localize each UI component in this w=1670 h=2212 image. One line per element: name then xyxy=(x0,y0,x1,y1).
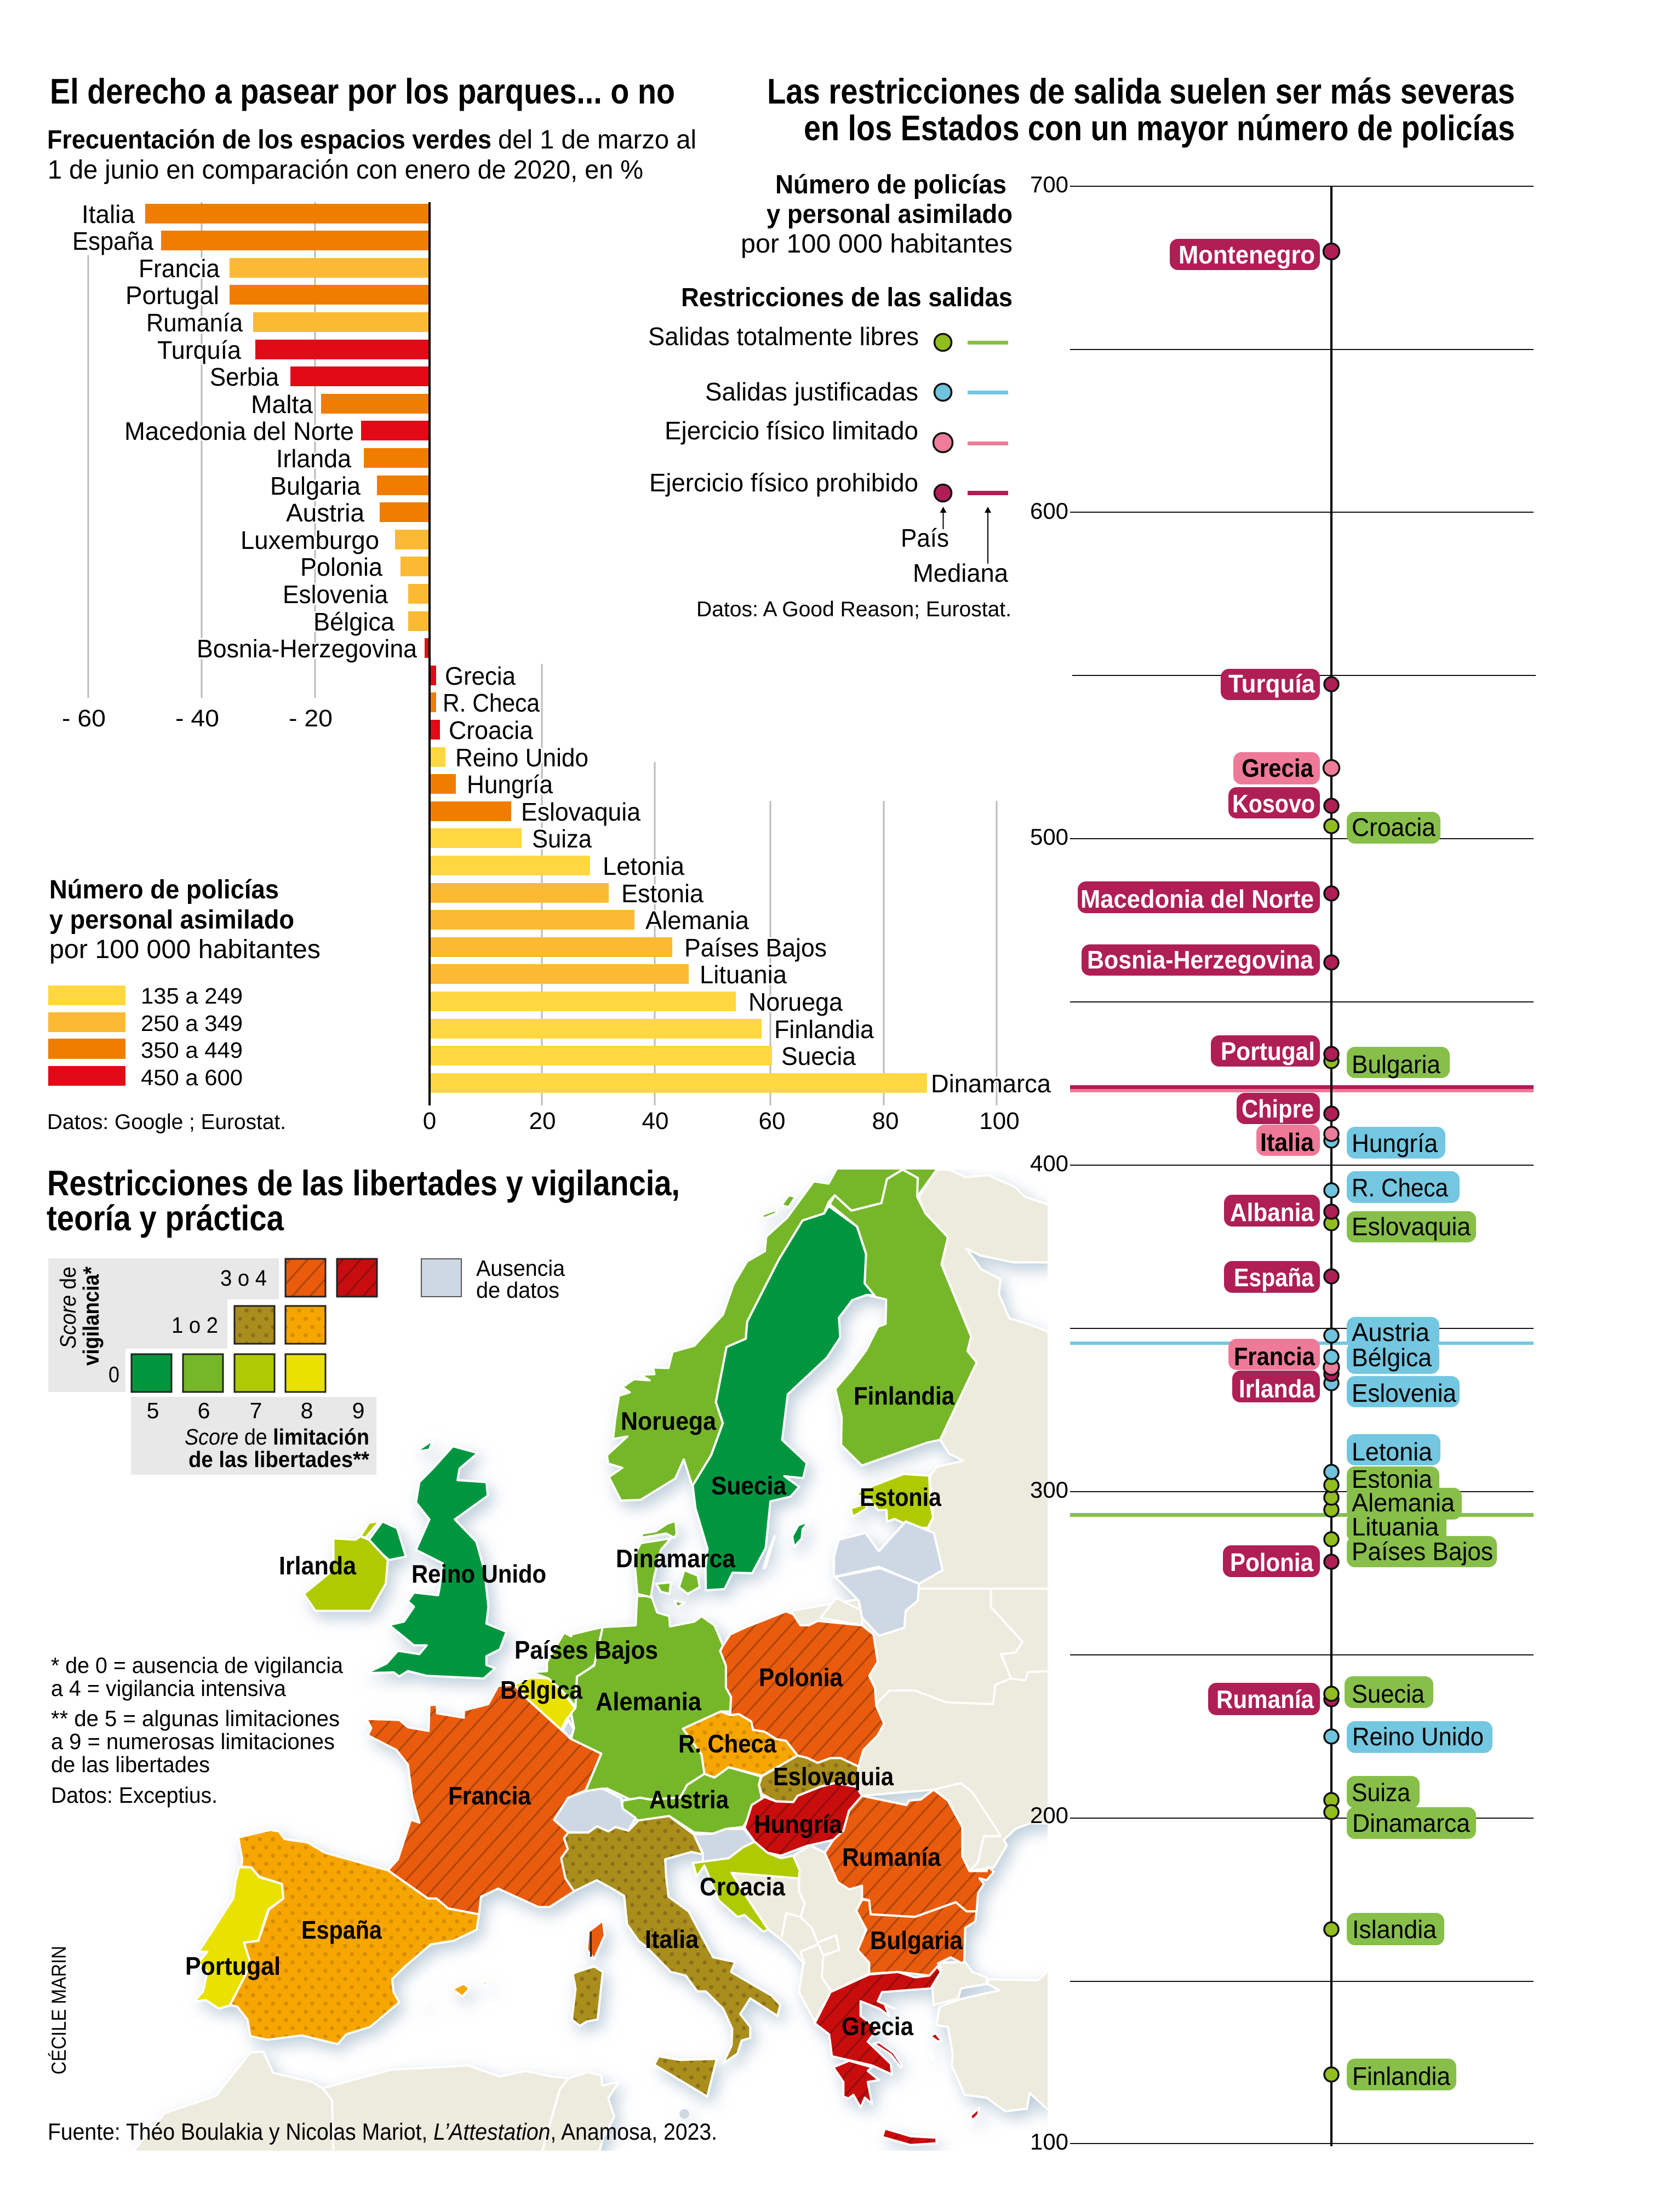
heading: map: Restricciones de las libertades y vigilancia, xyxy=(47,1163,680,1203)
country labels right: Lituania xyxy=(1352,1512,1439,1541)
bar labels: Portugal xyxy=(125,281,219,310)
country labels right: Bulgaria xyxy=(1352,1050,1440,1079)
legend: police per 100 000 (bars) xyxy=(48,875,321,1090)
bar labels: R. Checa xyxy=(443,689,540,717)
land: eastern Europe xyxy=(786,1589,1050,1871)
map country labels: Alemania xyxy=(596,1687,701,1716)
map country labels: España xyxy=(301,1916,382,1944)
axis values: 200 xyxy=(1030,1802,1068,1828)
arrow: country xyxy=(940,507,947,529)
legend: police per 100 000 (bars): y personal asimilado xyxy=(49,906,294,935)
credit: author: CÉCILE MARIN xyxy=(48,1946,70,2075)
map country labels xyxy=(185,1382,963,2041)
map country labels: Austria xyxy=(649,1785,729,1814)
land: Kaliningrad xyxy=(820,1598,862,1625)
positive bars xyxy=(430,666,927,1093)
country: Spain xyxy=(230,1830,479,2044)
map country labels: Estonia xyxy=(860,1483,941,1511)
axis tick labels: 80 xyxy=(872,1108,899,1134)
subtitle: parks: 1 de junio en comparación con enero de 2020, en % xyxy=(48,156,643,185)
map country labels: Finlandia xyxy=(854,1382,954,1410)
bar labels: Suiza xyxy=(532,824,592,853)
subtitle: parks: del 1 de marzo al xyxy=(498,125,696,154)
map country labels: Italia xyxy=(645,1925,699,1953)
country: United Kingdom xyxy=(365,1440,506,1678)
country labels left: España xyxy=(1234,1263,1314,1292)
country: Italy xyxy=(561,1816,780,2064)
subtitle: parks: Frecuentación de los espacios verdes xyxy=(47,125,491,154)
country: Slovenia xyxy=(694,1829,754,1862)
axis values: 100 xyxy=(1030,2129,1068,2154)
country labels right: Estonia xyxy=(1352,1465,1432,1493)
country: Germany xyxy=(571,1596,731,1801)
map country labels: Suecia xyxy=(711,1471,786,1500)
country: Romania xyxy=(825,1790,994,1917)
legend: no data: Ausencia xyxy=(476,1256,565,1281)
vertical axis xyxy=(1330,186,1332,2146)
Norwegian islands xyxy=(762,1195,796,1218)
country: Norway xyxy=(607,1167,938,1500)
bar labels: Francia xyxy=(139,254,220,283)
country: Bulgaria xyxy=(856,1900,977,1975)
bar labels: España xyxy=(72,227,153,255)
legend: bivariate matrix: Score de limitación xyxy=(185,1424,369,1449)
map country labels: Dinamarca xyxy=(616,1544,735,1573)
country: Greece xyxy=(815,1967,980,2145)
strip chart: police numbers by country xyxy=(1030,171,1536,2154)
legend: exit restrictions: Número de policías xyxy=(775,170,1006,199)
map country labels: Irlanda xyxy=(279,1551,356,1580)
legend: bivariate matrix xyxy=(48,1258,377,1475)
country: Poland xyxy=(720,1612,884,1767)
legend: exit restrictions: Salidas justificadas xyxy=(705,377,918,406)
zero axis xyxy=(428,202,431,1105)
legend: bivariate matrix: de las libertades** xyxy=(188,1447,369,1472)
notes: Datos: Exceptius. xyxy=(51,1783,218,1808)
axis tick labels: - 40 xyxy=(175,705,219,732)
map country labels: Países Bajos xyxy=(514,1636,658,1664)
legend: exit restrictions: Salidas totalmente libres xyxy=(648,322,919,351)
bar labels: Grecia xyxy=(445,662,516,690)
legend: bivariate matrix: vigilancia* xyxy=(78,1267,104,1366)
median lines xyxy=(1070,1085,1534,1517)
country: Croatia xyxy=(693,1842,799,1932)
country labels right: Finlandia xyxy=(1352,2062,1450,2090)
legend: bivariate matrix: Score de xyxy=(55,1267,81,1349)
map country labels: Francia xyxy=(448,1781,531,1810)
Malta xyxy=(679,2109,689,2119)
country labels left: Albania xyxy=(1230,1198,1314,1227)
legend: exit restrictions: Restricciones de las salidas xyxy=(681,283,1013,312)
axis values: 400 xyxy=(1030,1150,1068,1176)
legend: police per 100 000 (bars): Número de policías xyxy=(49,875,279,904)
Balearic islands xyxy=(423,1981,488,2005)
land: Thrace xyxy=(932,1962,987,2005)
map country labels: Reino Unido xyxy=(411,1560,546,1588)
axis tick labels: 0 xyxy=(423,1108,436,1134)
country labels right: Croacia xyxy=(1352,813,1435,841)
bar labels: Letonia xyxy=(603,852,684,880)
country labels left: Francia xyxy=(1234,1342,1315,1371)
bar labels: Noruega xyxy=(748,988,843,1016)
bar labels: Bélgica xyxy=(313,608,394,636)
country: Denmark xyxy=(634,1538,700,1607)
country labels left: Rumanía xyxy=(1216,1685,1314,1714)
heading: map xyxy=(47,1163,680,1238)
map country labels: Bélgica xyxy=(500,1676,582,1704)
legend: exit restrictions: Ejercicio físico limitado xyxy=(665,416,918,445)
bar labels: Eslovaquia xyxy=(521,798,640,826)
axis values: 700 xyxy=(1030,171,1068,197)
legend: exit restrictions: País xyxy=(901,524,949,552)
bar labels: Dinamarca xyxy=(931,1069,1051,1098)
bar labels xyxy=(72,200,1051,1098)
country labels right: Suiza xyxy=(1352,1778,1410,1807)
country labels right: R. Checa xyxy=(1352,1173,1448,1202)
bar labels: Serbia xyxy=(210,363,279,391)
map country labels: Rumanía xyxy=(842,1843,941,1871)
map country labels: Grecia xyxy=(842,2012,913,2041)
map country labels: Bulgaria xyxy=(870,1926,963,1955)
legend: police per 100 000 (bars): por 100 000 habitantes xyxy=(49,935,321,964)
legend: bivariate matrix: 9 xyxy=(352,1398,364,1423)
Sardinia xyxy=(572,1967,603,2026)
axis tick labels: 100 xyxy=(979,1108,1020,1134)
heading: map: teoría y práctica xyxy=(47,1198,284,1238)
country labels right: Eslovenia xyxy=(1352,1379,1456,1407)
country: Finland xyxy=(830,1170,977,1465)
legend: bivariate matrix: 7 xyxy=(250,1398,262,1423)
country dots xyxy=(1324,243,1339,2082)
bar labels: Croacia xyxy=(449,716,533,744)
country labels left: Portugal xyxy=(1221,1037,1315,1065)
axis tick labels: - 20 xyxy=(289,705,333,732)
bar labels: Lituania xyxy=(700,960,787,989)
legend: exit restrictions xyxy=(648,170,1013,621)
country labels left: Chipre xyxy=(1242,1094,1314,1123)
axis tick labels: 20 xyxy=(529,1108,556,1134)
bar labels: Rumanía xyxy=(146,308,243,337)
bar labels: Reino Unido xyxy=(455,743,588,772)
legend: police per 100 000 (bars): 450 a 600 xyxy=(141,1065,243,1090)
country: Slovakia xyxy=(759,1756,859,1802)
legend: bivariate matrix: 0 xyxy=(108,1362,119,1387)
country labels right: Dinamarca xyxy=(1352,1809,1470,1837)
legend: no data: de datos xyxy=(476,1277,559,1303)
source: map: Fuente: Théo Boulakia y Nicolas Mariot, L’Attestation, Anamosa, 2023. xyxy=(48,2119,717,2145)
notes: a 9 = numerosas limitaciones xyxy=(51,1729,335,1754)
bar labels: Austria xyxy=(286,498,364,527)
notes: a 4 = vigilancia intensiva xyxy=(51,1676,286,1701)
legend: police per 100 000 (bars): 135 a 249 xyxy=(141,983,243,1008)
bar labels: Malta xyxy=(251,390,313,419)
source: bars: Datos: Google ; Eurostat. xyxy=(47,1110,286,1134)
legend: bivariate matrix: 8 xyxy=(301,1398,313,1423)
bar labels: Turquía xyxy=(157,336,241,364)
map country labels: Croacia xyxy=(700,1872,785,1901)
map country labels: Eslovaquia xyxy=(773,1762,894,1791)
legend: police per 100 000 (bars): 350 a 449 xyxy=(141,1038,243,1063)
legend: bivariate matrix: 5 xyxy=(147,1398,159,1423)
axis values: 500 xyxy=(1030,824,1068,850)
axis tick labels: 60 xyxy=(759,1108,785,1134)
country labels right: Austria xyxy=(1352,1318,1429,1346)
country labels right: Letonia xyxy=(1352,1437,1432,1466)
land: western Balkans xyxy=(731,1846,869,2021)
country: Latvia xyxy=(834,1521,942,1584)
country labels left: Kosovo xyxy=(1232,789,1315,818)
bar labels: Países Bajos xyxy=(684,933,827,962)
legend: exit restrictions: y personal asimilado xyxy=(767,200,1013,229)
legend: exit restrictions: Ejercicio físico prohibido xyxy=(649,468,918,497)
land: Turkey xyxy=(936,1968,1050,2111)
country labels left: Macedonia del Norte xyxy=(1080,885,1314,913)
axis values: 300 xyxy=(1030,1477,1068,1503)
legend: bivariate matrix: 3 o 4 xyxy=(220,1265,267,1291)
legend: police per 100 000 (bars): 250 a 349 xyxy=(141,1011,243,1036)
map country labels: Hungría xyxy=(754,1810,842,1838)
legend: bivariate matrix: 1 o 2 xyxy=(171,1313,218,1338)
bar labels: Irlanda xyxy=(276,444,351,473)
bar labels: Luxemburgo xyxy=(241,526,379,554)
country labels left: Polonia xyxy=(1230,1548,1313,1577)
Sicily xyxy=(654,2056,717,2096)
bar labels: Alemania xyxy=(645,906,749,935)
negative bars xyxy=(145,204,430,658)
legend: exit restrictions: Datos: A Good Reason; Eurostat. xyxy=(696,598,1011,621)
map country labels: Portugal xyxy=(185,1952,281,1980)
bar labels: Macedonia del Norte xyxy=(124,417,354,445)
axis tick labels: - 60 xyxy=(62,705,106,732)
country labels left: Grecia xyxy=(1242,754,1313,782)
country: Lithuania xyxy=(836,1568,919,1636)
country labels right: Países Bajos xyxy=(1352,1537,1493,1566)
country labels right: Alemania xyxy=(1352,1488,1455,1517)
land: northern Russia xyxy=(910,1170,1050,1598)
bar labels: Eslovenia xyxy=(283,580,388,609)
heading: parks: El derecho a pasear por los parques... o no xyxy=(50,71,675,111)
map country labels: R. Checa xyxy=(678,1729,776,1758)
heading: restrictions: en los Estados con un mayor número de policías xyxy=(804,108,1515,148)
legend: no data xyxy=(421,1256,565,1303)
heading: restrictions xyxy=(767,71,1515,148)
country: France xyxy=(367,1684,602,1915)
country labels right: Reino Unido xyxy=(1352,1722,1484,1751)
bar labels: Polonia xyxy=(300,553,382,581)
country labels right: Suecia xyxy=(1352,1680,1425,1708)
country labels left: Bosnia-Herzegovina xyxy=(1087,945,1313,974)
map country labels: Polonia xyxy=(759,1663,843,1692)
country: Austria xyxy=(621,1767,762,1833)
heading: restrictions: Las restricciones de salida suelen ser más severas xyxy=(767,71,1515,111)
legend: bivariate matrix: 6 xyxy=(198,1398,210,1423)
country labels right xyxy=(1345,812,1497,2090)
Corsica stroke xyxy=(590,1932,592,1957)
axis tick labels: 40 xyxy=(642,1108,668,1134)
bar labels: Hungría xyxy=(467,770,553,799)
bar labels: Suecia xyxy=(781,1042,856,1070)
country: Ireland xyxy=(304,1521,388,1611)
Corsica xyxy=(587,1921,605,1959)
bar labels: Estonia xyxy=(621,879,704,908)
country: Belgium xyxy=(514,1677,576,1730)
country labels right: Bélgica xyxy=(1352,1343,1432,1372)
country labels right: Islandia xyxy=(1352,1915,1437,1944)
country: Czech Republic xyxy=(683,1711,798,1778)
country: Portugal xyxy=(195,1867,283,2009)
Danish island xyxy=(642,1521,677,1538)
country labels left: Irlanda xyxy=(1239,1374,1315,1403)
country labels right: Hungría xyxy=(1352,1129,1438,1157)
country labels left xyxy=(1078,239,1320,1715)
notes: de las libertades xyxy=(51,1752,210,1777)
subtitle: parks xyxy=(47,125,696,185)
bar labels: Italia xyxy=(82,200,135,228)
arrow: median xyxy=(985,507,991,564)
country labels left: Italia xyxy=(1260,1128,1314,1156)
country: Netherlands xyxy=(531,1627,603,1708)
notes: * de 0 = ausencia de vigilancia xyxy=(51,1653,343,1678)
bar chart: green-space attendance xyxy=(62,200,1051,1134)
bar labels: Bosnia-Herzegovina xyxy=(197,634,417,663)
country: Switzerland xyxy=(554,1789,636,1832)
notes: ** de 5 = algunas limitaciones xyxy=(51,1706,340,1731)
axis tick labels xyxy=(62,705,1020,1134)
map of Europe xyxy=(130,1167,1050,2156)
bar labels: Finlandia xyxy=(774,1015,874,1044)
map country labels: Noruega xyxy=(621,1407,716,1435)
country labels right: Eslovaquia xyxy=(1352,1212,1471,1241)
country: Hungary xyxy=(745,1783,862,1855)
notes xyxy=(51,1653,343,1808)
axis values xyxy=(1030,171,1068,2154)
country: Estonia xyxy=(851,1474,933,1528)
bar labels: Bulgaria xyxy=(270,472,361,500)
country: Luxembourg xyxy=(563,1720,574,1738)
Swedish islands xyxy=(763,1521,809,1568)
legend: exit restrictions: Mediana xyxy=(913,559,1008,587)
country labels left: Montenegro xyxy=(1179,240,1315,269)
legend: exit restrictions: por 100 000 habitantes xyxy=(741,230,1013,259)
country labels left: Turquía xyxy=(1228,669,1315,698)
country: Sweden xyxy=(693,1206,874,1590)
land: North Africa xyxy=(130,2051,619,2156)
axis values: 600 xyxy=(1030,498,1068,524)
